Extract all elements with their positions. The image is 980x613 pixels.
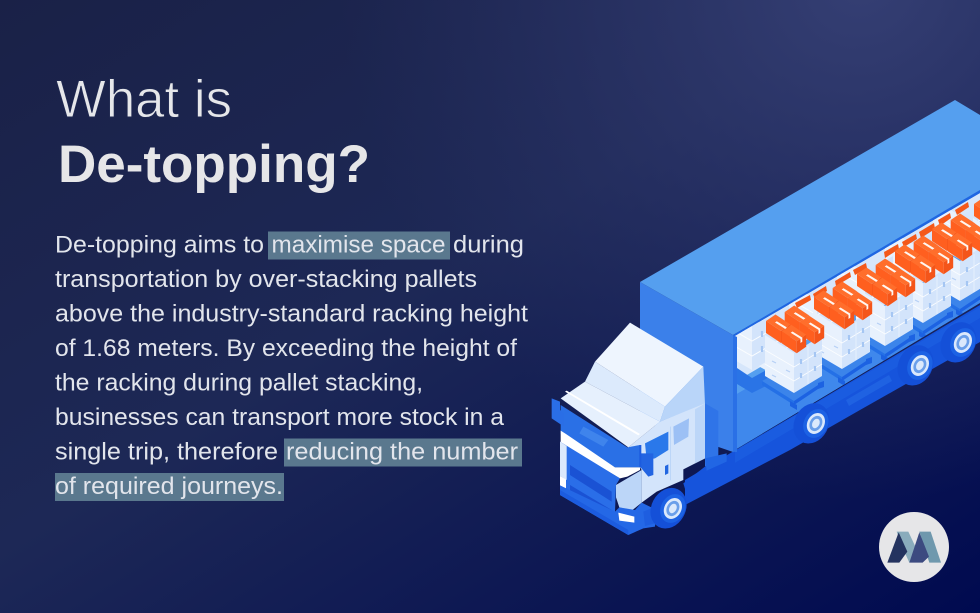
trailer front face xyxy=(640,282,733,452)
title: De-topping? xyxy=(58,135,370,194)
front wheel xyxy=(644,482,693,535)
body paragraph: single trip, therefore xyxy=(55,438,278,466)
grille stripes xyxy=(570,465,612,520)
cab front pale corner xyxy=(616,470,642,511)
side window xyxy=(645,432,668,460)
step xyxy=(643,507,655,526)
trailer floor band xyxy=(733,307,980,464)
body paragraph: reducing the number xyxy=(286,438,518,466)
cargo opening xyxy=(724,188,980,450)
highlight: reducing the number xyxy=(284,438,522,466)
trailer opening left edge xyxy=(733,335,737,452)
front wheel arch xyxy=(646,482,693,533)
white stripe xyxy=(561,431,640,478)
body paragraph: of required journeys. xyxy=(55,473,283,500)
body paragraph: the racking during pallet stacking, xyxy=(55,370,423,396)
bumper xyxy=(560,485,657,535)
truck illustration xyxy=(552,100,980,535)
title xyxy=(56,70,370,194)
logo circle xyxy=(879,512,949,582)
body paragraph: maximise space xyxy=(272,232,446,258)
cab side xyxy=(628,403,705,503)
visor xyxy=(561,382,660,447)
cab connection chassis xyxy=(683,452,735,500)
grille panel xyxy=(560,442,628,535)
body paragraph: above the industry-standard racking height xyxy=(55,300,528,328)
front row of pallets with orange boxes xyxy=(724,188,980,410)
body paragraph: transportation by over-stacking pallets xyxy=(55,266,477,293)
logo xyxy=(879,512,949,582)
body paragraph: De-topping aims to xyxy=(55,232,264,258)
cab xyxy=(552,323,735,535)
trailer box xyxy=(640,100,980,464)
mirrors xyxy=(552,398,564,427)
rear row of pallets xyxy=(741,200,980,372)
body paragraph: during xyxy=(453,232,524,258)
body paragraph: of 1.68 meters. By exceeding the height of xyxy=(55,335,517,362)
headlight xyxy=(618,513,634,523)
rear wheels xyxy=(787,316,980,450)
chassis xyxy=(685,305,980,505)
trailer top face xyxy=(640,100,980,335)
highlight: maximise space xyxy=(268,232,450,260)
logo M mark xyxy=(887,532,941,563)
body paragraph: businesses can transport more stock in a xyxy=(55,404,505,431)
windshield xyxy=(561,405,640,467)
title: What is xyxy=(56,70,232,129)
body paragraph xyxy=(55,232,528,501)
highlight: of required journeys xyxy=(55,473,284,501)
fairing xyxy=(595,323,703,407)
